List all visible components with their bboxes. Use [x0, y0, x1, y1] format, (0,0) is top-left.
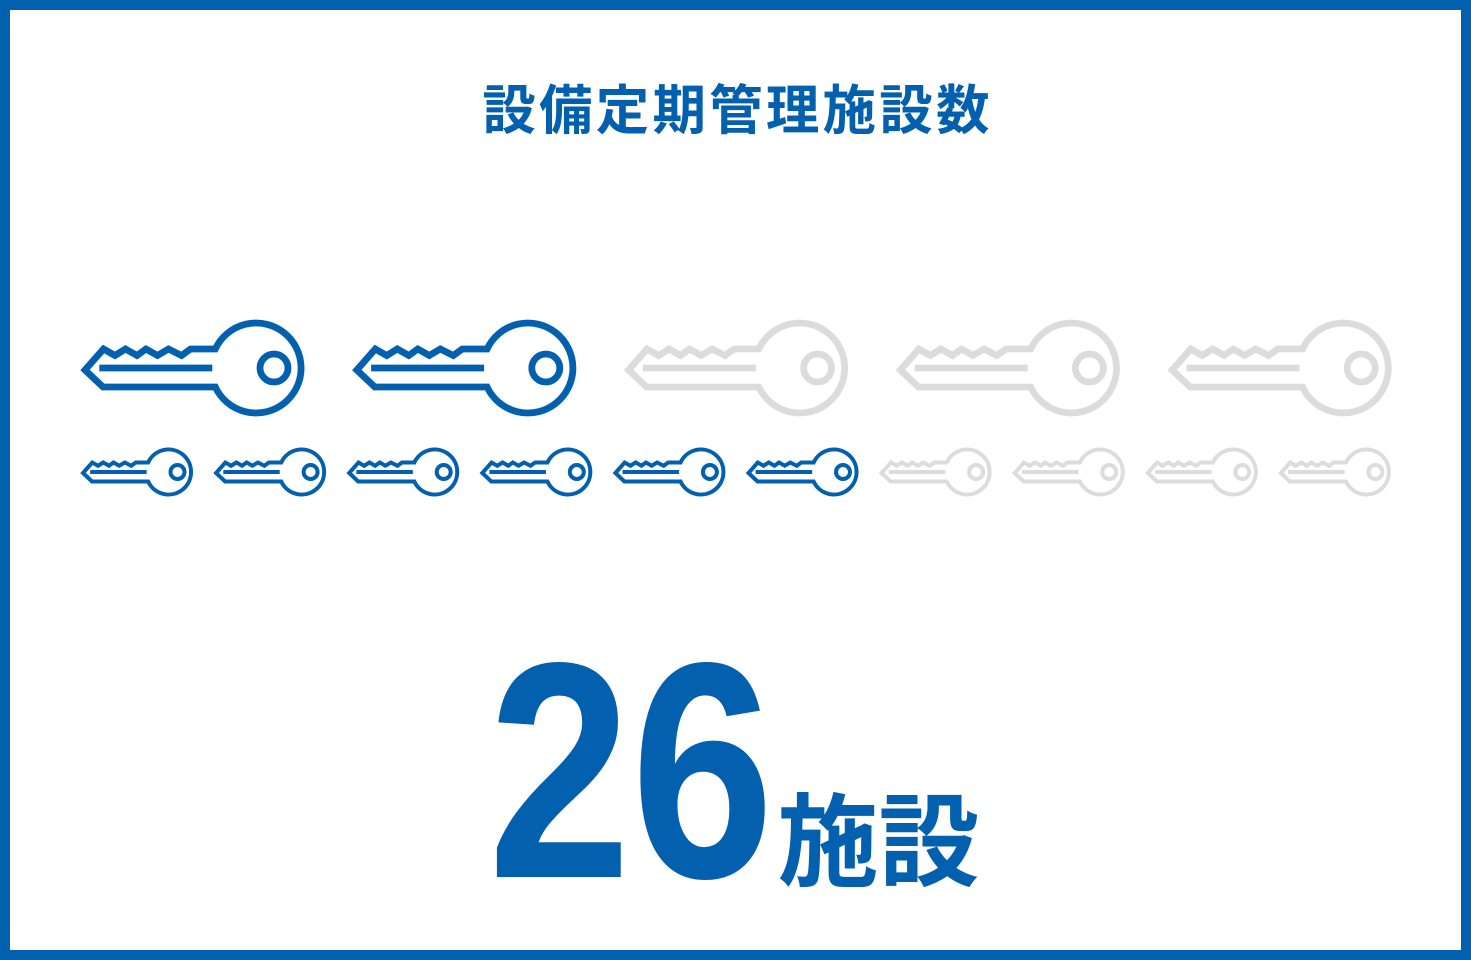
icon: small key 4 active: [482, 450, 590, 494]
icon: small key 5 active: [615, 450, 723, 494]
icon: small key 9 inactive: [1148, 450, 1256, 494]
icon: large key 1 active: [85, 323, 301, 413]
icon: small key 2 active: [216, 450, 324, 494]
icon: small key 7 inactive: [882, 450, 990, 494]
small keys row: 6 of 10 filled: [83, 450, 1389, 494]
large keys row: 2 of 5 filled: [85, 323, 1388, 413]
unit label: 施設: [778, 788, 980, 900]
icon: small key 6 active: [748, 450, 857, 494]
icon: large key 2 active: [357, 323, 573, 413]
icon: large key 4 inactive: [900, 323, 1116, 413]
icon: small key 10 inactive: [1281, 450, 1389, 494]
icon: small key 3 active: [349, 450, 457, 494]
icon: large key 3 inactive: [629, 323, 845, 413]
icon: small key 8 inactive: [1015, 450, 1123, 494]
title: 設備定期管理施設数: [482, 82, 993, 141]
icon: large key 5 inactive: [1172, 323, 1388, 413]
big number: 26: [488, 599, 774, 943]
icon: small key 1 active: [83, 450, 191, 494]
